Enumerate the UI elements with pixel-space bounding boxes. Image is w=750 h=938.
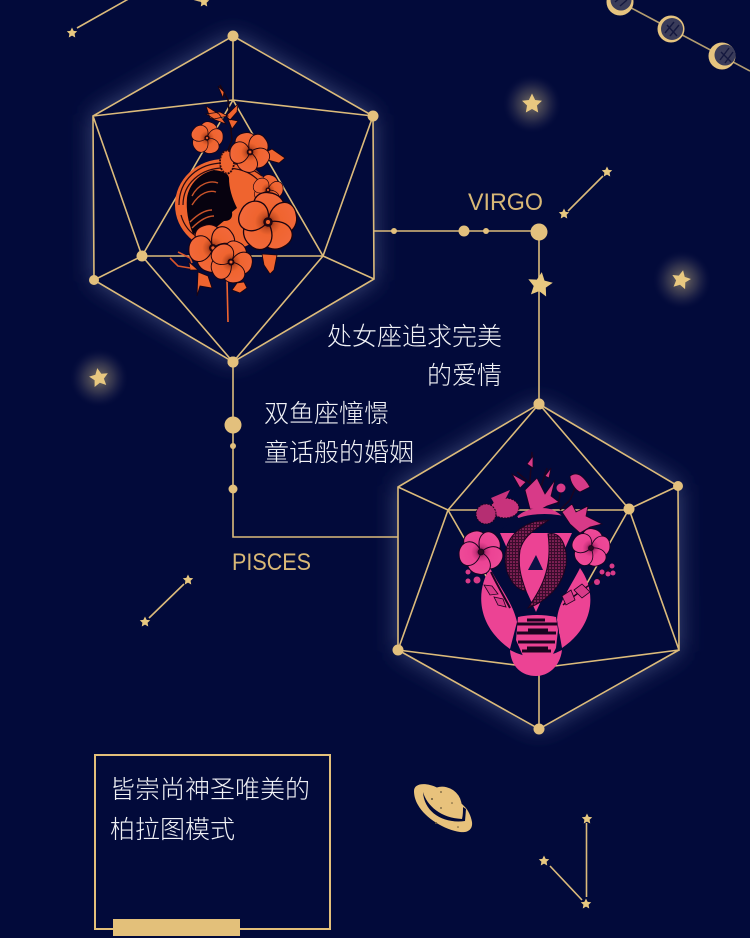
text: Pisces description: 双鱼座憧憬	[264, 400, 389, 428]
portrait medallion	[175, 159, 273, 251]
constellation: moon phases	[606, 0, 750, 71]
polyhedron: Virgo	[89, 30, 378, 368]
glowing star: upper right	[502, 74, 562, 134]
glowing star: right	[652, 250, 712, 310]
left pink disc segment	[481, 568, 517, 649]
small triangle	[528, 555, 543, 570]
pom flowers	[491, 498, 519, 518]
moon 2	[658, 16, 684, 42]
flowers	[184, 117, 229, 161]
connector: Pisces	[224, 356, 398, 537]
text: Virgo description: 的爱情	[427, 362, 502, 390]
text: Pisces description: 童话般的婚姻	[264, 439, 414, 467]
top sprigs and leaves	[517, 452, 577, 515]
inverted triangle	[500, 533, 572, 612]
hair and profile	[187, 170, 237, 234]
moon 3	[708, 42, 736, 70]
constellation: bottom right	[539, 814, 592, 908]
constellation: top left	[67, 0, 209, 37]
bulb screw base	[516, 615, 558, 661]
flowers	[450, 523, 513, 585]
right fish	[528, 533, 566, 608]
illustration: Virgo woman and flowers	[170, 85, 305, 322]
connector: Virgo	[374, 224, 554, 410]
icon: Saturn	[414, 779, 472, 832]
bottom half disc	[510, 650, 562, 676]
left fish	[505, 520, 549, 591]
text: Virgo description: 处女座追求完美	[327, 323, 502, 351]
label: VIRGO: VIRGO	[468, 189, 543, 216]
callout text: 皆崇尚神圣唯美的	[110, 776, 310, 804]
constellation: two stars right of Virgo label	[559, 166, 612, 218]
cameo gem	[220, 150, 234, 174]
label: PISCES: PISCES	[232, 549, 311, 576]
right pink disc segment	[557, 568, 590, 648]
callout box	[95, 755, 330, 936]
bulb silhouette	[490, 517, 584, 650]
constellation: two stars lower left	[140, 574, 193, 626]
moon 1	[606, 0, 634, 16]
right branch	[563, 566, 612, 605]
illustration: Pisces bulb, fish and flowers	[450, 452, 616, 676]
branch, stem and leaves	[170, 85, 285, 322]
left branch	[491, 572, 510, 608]
callout text: 柏拉图模式	[110, 816, 235, 844]
glowing star: left	[69, 348, 129, 408]
polyhedron: Pisces	[392, 398, 683, 734]
